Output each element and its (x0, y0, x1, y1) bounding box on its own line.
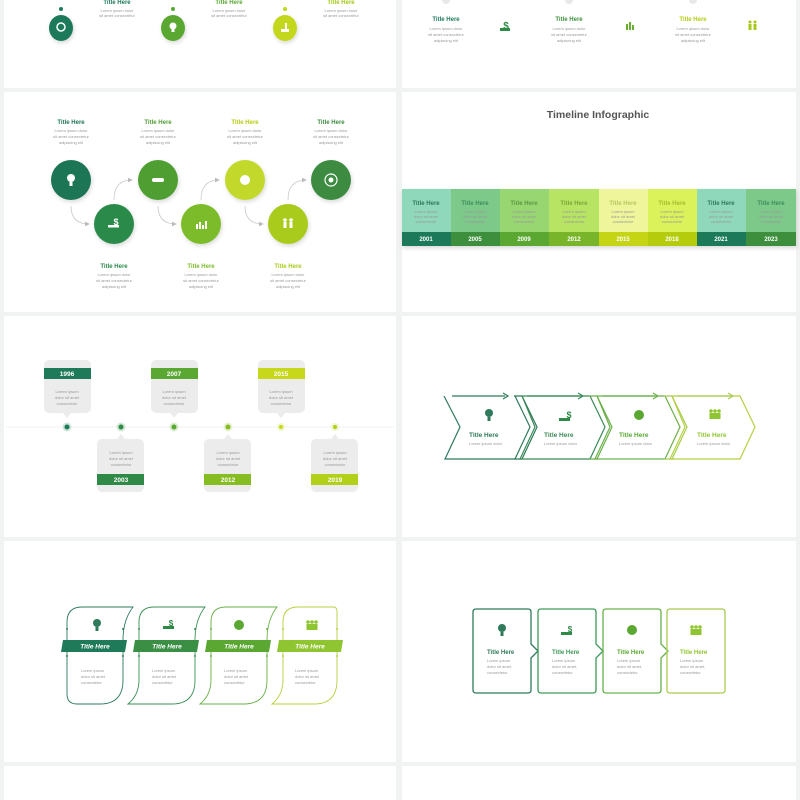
callout text: Lorem ipsum (216, 450, 240, 455)
callout text: Lorem ipsum (323, 450, 347, 455)
timeline band: Lorem ipsum (709, 209, 733, 214)
timeline band: Lorem ipsum (562, 209, 586, 214)
card text: consectetur (81, 680, 102, 685)
text blocks: sit amet consectetur (99, 13, 136, 18)
timeline band: Title Here (412, 201, 440, 207)
icons in circles: $ (113, 217, 119, 227)
card text: dolor sit amet (295, 674, 320, 679)
title: Timeline Infographic (547, 109, 649, 121)
text blocks: adipiscing elit (319, 140, 344, 145)
text blocks: Lorem ipsum dolor (676, 26, 710, 31)
timeline band: consectetur (564, 219, 585, 224)
titles: Lorem ipsum dolor (619, 441, 653, 446)
box text (487, 650, 708, 675)
panel: zigzag circle process (4, 92, 396, 312)
timeline band: dolor sit amet (759, 214, 784, 219)
text blocks: sit amet consectetur (551, 32, 588, 37)
timeline band: Title Here (658, 201, 686, 207)
panel: year callout timeline (4, 316, 396, 537)
text blocks: adipiscing elit (557, 38, 582, 43)
timeline band: Lorem ipsum (463, 209, 487, 214)
title bands: Title Here (152, 644, 182, 650)
icons: $ (503, 21, 509, 32)
card text: Lorem ipsum (81, 668, 105, 673)
callout text: Lorem ipsum (162, 389, 186, 394)
box text: Lorem ipsum (680, 658, 704, 663)
timeline band: consectetur (662, 219, 683, 224)
card text (81, 668, 320, 685)
callout text: dolor sit amet (55, 395, 80, 400)
text blocks (428, 17, 712, 43)
callout text: Lorem ipsum (109, 450, 133, 455)
icons: $ (169, 619, 174, 628)
text blocks: Title Here (555, 17, 583, 23)
timeline band (402, 189, 796, 246)
title bands: Title Here (80, 644, 110, 650)
text blocks: adipiscing elit (434, 38, 459, 43)
text blocks: sit amet consectetur (227, 134, 264, 139)
timeline band: 2018 (665, 237, 679, 243)
timeline band: Title Here (757, 201, 785, 207)
timeline band: Lorem ipsum (759, 209, 783, 214)
panel: bottom partial slides (4, 766, 796, 800)
year bands: 2007 (167, 371, 182, 378)
timeline band: dolor sit amet (512, 214, 537, 219)
card text: Lorem ipsum (152, 668, 176, 673)
text blocks: sit amet consectetur (53, 134, 90, 139)
card text: Lorem ipsum (295, 668, 319, 673)
icons: $ (566, 410, 572, 420)
text blocks: Lorem ipsum dolor (429, 26, 463, 31)
panel: chevron process (402, 316, 796, 537)
box text: Lorem ipsum (552, 658, 576, 663)
card text: consectetur (295, 680, 316, 685)
timeline band: Title Here (461, 201, 489, 207)
titles: Lorem ipsum dolor (469, 441, 503, 446)
text blocks: sit amet consectetur (96, 278, 133, 283)
circles (51, 160, 351, 244)
panel: connected boxes (402, 541, 796, 762)
text blocks: Title Here (317, 120, 345, 126)
title bands: Title Here (295, 644, 325, 650)
icons (498, 624, 702, 636)
titles: Title Here (469, 432, 499, 439)
callout text: dolor sit amet (162, 395, 187, 400)
timeline band: dolor sit amet (414, 214, 439, 219)
timeline band: Title Here (510, 201, 538, 207)
callout text: consectetur (111, 462, 132, 467)
card text: dolor sit amet (224, 674, 249, 679)
text blocks: Lorem ipsum dolor (54, 128, 88, 133)
dots (64, 424, 338, 430)
callout text: dolor sit amet (323, 456, 348, 461)
text blocks (53, 120, 350, 289)
text blocks: Title Here (231, 120, 259, 126)
text blocks: sit amet consectetur (270, 278, 307, 283)
box text: dolor sit amet, (552, 664, 577, 669)
icons (500, 20, 756, 32)
box text: consectetur (552, 670, 573, 675)
card text: dolor sit amet (81, 674, 106, 679)
text blocks: sit amet consectetur (428, 32, 465, 37)
timeline band: Title Here (560, 201, 588, 207)
text blocks: adipiscing elit (681, 38, 706, 43)
callout text: dolor sit amet (269, 395, 294, 400)
text blocks: Lorem ipsum dolor (141, 128, 175, 133)
year bands: 1996 (60, 371, 75, 378)
timeline band: 2021 (714, 237, 728, 243)
timeline band: dolor sit amet (463, 214, 488, 219)
box text: Lorem ipsum (487, 658, 511, 663)
timeline band: consectetur (416, 219, 437, 224)
box text: dolor sit amet, (680, 664, 705, 669)
timeline band: consectetur (514, 219, 535, 224)
callout text: consectetur (57, 401, 78, 406)
text blocks: adipiscing elit (276, 284, 301, 289)
text blocks: adipiscing elit (59, 140, 84, 145)
text blocks: sit amet consectetur (140, 134, 177, 139)
text blocks: adipiscing elit (146, 140, 171, 145)
timeline band: consectetur (761, 219, 782, 224)
timeline band: Title Here (707, 201, 735, 207)
text blocks: Title Here (327, 0, 355, 6)
timeline band: 2023 (764, 237, 778, 243)
box text: Title Here (617, 650, 645, 656)
arrows (452, 393, 733, 399)
callout text: consectetur (164, 401, 185, 406)
icons in circles (67, 174, 337, 229)
titles: Title Here (544, 432, 574, 439)
text blocks: Lorem ipsum dolor (552, 26, 586, 31)
timeline band: consectetur (711, 219, 732, 224)
card text: dolor sit amet (152, 674, 177, 679)
titles: Title Here (697, 432, 727, 439)
text blocks: adipiscing elit (233, 140, 258, 145)
text blocks: Title Here (679, 17, 707, 23)
connector dots (66, 628, 338, 657)
timeline band: dolor sit amet (611, 214, 636, 219)
box text: Lorem ipsum (617, 658, 641, 663)
text blocks: sit amet consectetur (323, 13, 360, 18)
leaf shapes (67, 607, 337, 704)
year bands (44, 368, 358, 485)
callout text: Lorem ipsum (269, 389, 293, 394)
text blocks: sit amet consectetur (183, 278, 220, 283)
text blocks: Title Here (144, 120, 172, 126)
box text: consectetur (617, 670, 638, 675)
callout text: consectetur (271, 401, 292, 406)
callout text (55, 389, 348, 467)
title bands: Title Here (224, 644, 254, 650)
timeline band: Lorem ipsum (414, 209, 438, 214)
text blocks: Lorem ipsum dolor (324, 8, 358, 13)
timeline band: 2001 (419, 237, 433, 243)
panel: top-left partial slide (4, 0, 396, 88)
timeline band: dolor sit amet (660, 214, 685, 219)
box text: Title Here (680, 650, 708, 656)
box text: dolor sit amet, (487, 664, 512, 669)
text blocks: Title Here (103, 0, 131, 6)
timeline band: dolor sit amet (562, 214, 587, 219)
box text: Title Here (552, 650, 580, 656)
text blocks: adipiscing elit (102, 284, 127, 289)
timeline band: Title Here (609, 201, 637, 207)
text blocks: Title Here (215, 0, 243, 6)
titles: Lorem ipsum dolor (544, 441, 578, 446)
box text: consectetur (680, 670, 701, 675)
text blocks (99, 0, 360, 18)
titles (469, 432, 731, 446)
titles: Title Here (619, 432, 649, 439)
boxes (473, 609, 725, 693)
text blocks: Lorem ipsum dolor (271, 272, 305, 277)
text blocks: Title Here (100, 264, 128, 270)
panel: top-right partial slide (402, 0, 796, 88)
callout text: Lorem ipsum (55, 389, 79, 394)
panel: leaf cards (4, 541, 396, 762)
text blocks: Lorem ipsum dolor (97, 272, 131, 277)
box text: consectetur (487, 670, 508, 675)
year bands: 2015 (274, 371, 289, 378)
icon circles row (49, 7, 297, 41)
box text: dolor sit amet, (617, 664, 642, 669)
title bands (61, 640, 343, 652)
card text: consectetur (152, 680, 173, 685)
callout text: consectetur (325, 462, 346, 467)
icons: $ (568, 625, 573, 634)
timeline band: 2009 (517, 237, 531, 243)
text blocks: Title Here (57, 120, 85, 126)
year bands: 2019 (328, 477, 343, 484)
text blocks: Lorem ipsum dolor (228, 128, 262, 133)
text blocks: adipiscing elit (189, 284, 214, 289)
box text: Title Here (487, 650, 515, 656)
text blocks: sit amet consectetur (211, 13, 248, 18)
text blocks: Lorem ipsum dolor (314, 128, 348, 133)
curved arrows (71, 180, 306, 224)
timeline band: Lorem ipsum (611, 209, 635, 214)
icons (93, 619, 318, 631)
timeline band: Lorem ipsum (512, 209, 536, 214)
text blocks: Lorem ipsum dolor (100, 8, 134, 13)
text blocks: Lorem ipsum dolor (184, 272, 218, 277)
callout text: dolor sit amet (109, 456, 134, 461)
timeline band: 2015 (616, 237, 630, 243)
year bands: 2003 (114, 477, 129, 484)
timeline band: consectetur (613, 219, 634, 224)
titles: Lorem ipsum dolor (697, 441, 731, 446)
year bands: 2012 (221, 477, 236, 484)
timeline band: consectetur (465, 219, 486, 224)
callout boxes (44, 360, 358, 492)
chevrons (444, 396, 755, 459)
callout text: dolor sit amet (216, 456, 241, 461)
text blocks: sit amet consectetur (313, 134, 350, 139)
timeline band: dolor sit amet (709, 214, 734, 219)
panel: timeline infographic bands (402, 92, 796, 312)
text blocks: Lorem ipsum dolor (212, 8, 246, 13)
callout text: consectetur (218, 462, 239, 467)
text blocks: sit amet consectetur (675, 32, 712, 37)
icons (485, 409, 721, 421)
card text: consectetur (224, 680, 245, 685)
text blocks: Title Here (274, 264, 302, 270)
text blocks: Title Here (187, 264, 215, 270)
text blocks: Title Here (432, 17, 460, 23)
card text: Lorem ipsum (224, 668, 248, 673)
timeline band: 2005 (468, 237, 482, 243)
timeline band: Lorem ipsum (660, 209, 684, 214)
timeline band: 2012 (567, 237, 581, 243)
